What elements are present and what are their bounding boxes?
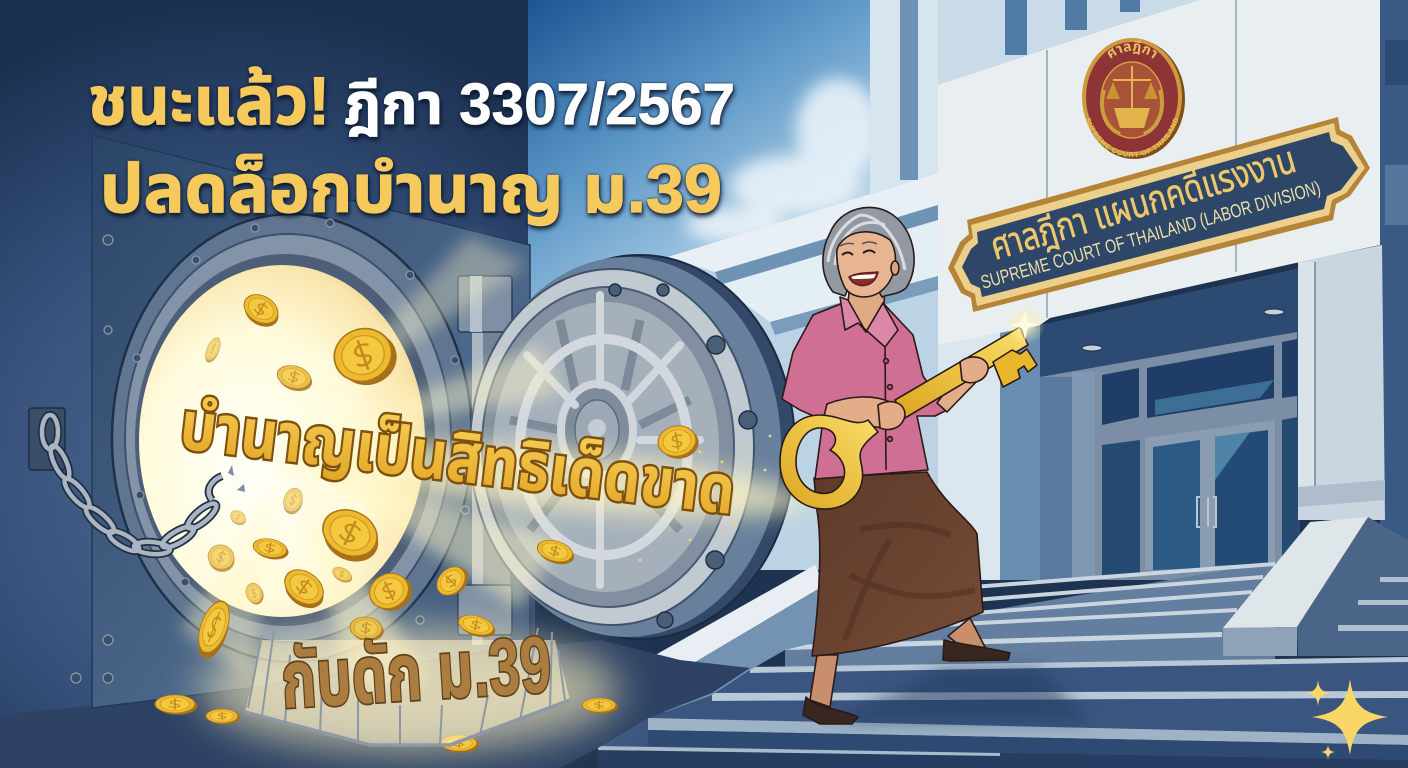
coins xyxy=(155,289,701,753)
vault rivets xyxy=(71,219,469,683)
forearm xyxy=(823,397,890,428)
chain xyxy=(29,408,245,556)
background: sky xyxy=(528,0,878,330)
back leg and shoe xyxy=(943,618,1010,661)
golden key xyxy=(780,327,1037,509)
building: left wing xyxy=(660,0,938,570)
vault frame xyxy=(112,214,472,662)
spike trap xyxy=(245,628,570,745)
vault wall panel xyxy=(92,135,530,708)
light rays xyxy=(180,235,560,690)
building: left pillar xyxy=(938,322,1040,580)
title xyxy=(88,63,735,227)
building: upper glazed floors xyxy=(938,0,1380,90)
court seal xyxy=(1082,38,1185,159)
sparkle dots along stream xyxy=(639,435,771,561)
title: line 1 gold: ชนะแล้ว! xyxy=(88,63,330,139)
sparkle icons xyxy=(1305,679,1388,759)
stairs xyxy=(598,562,1408,768)
woman xyxy=(780,207,1037,724)
court sign xyxy=(948,117,1370,312)
neck xyxy=(848,283,885,332)
title: line 1 white: ฎีกา 3307/2567 xyxy=(344,72,735,137)
vault opening xyxy=(112,214,472,662)
hinge column xyxy=(458,276,512,645)
court seal: SUPREME COURT OF THAILAND xyxy=(1086,118,1178,157)
right stair rail xyxy=(1223,517,1408,656)
stair shadow xyxy=(830,668,1090,722)
left stair rail xyxy=(650,565,825,712)
face xyxy=(837,232,895,297)
skirt xyxy=(812,472,983,656)
hair xyxy=(823,207,914,297)
key sparkle xyxy=(1005,305,1045,345)
floor xyxy=(0,640,750,768)
light stream to key xyxy=(268,425,812,531)
blouse xyxy=(782,303,947,479)
main banner text: บำนาญเป็นสิทธิเด็ดขาด xyxy=(176,387,739,529)
title: line 2 gold: ปลดล็อกบำนาญ ม.39 xyxy=(100,151,722,227)
building: main facade xyxy=(938,0,1380,345)
building: entrance recess xyxy=(1040,268,1300,580)
building: right pillar xyxy=(1298,245,1385,520)
glowing interior xyxy=(139,265,425,617)
cloud xyxy=(685,78,880,243)
background: vault wall xyxy=(0,0,535,768)
sign: thai label: ศาลฎีกา แผนกคดีแรงงาน xyxy=(986,139,1301,269)
trap label: กับดัก ม.39 xyxy=(279,620,554,725)
floor glow xyxy=(200,628,620,752)
building: right edge xyxy=(1380,0,1408,560)
court seal: ศาลฎีกา xyxy=(1108,40,1157,58)
front leg and shoe xyxy=(803,655,858,724)
hands xyxy=(878,357,988,429)
vault door xyxy=(470,255,795,639)
